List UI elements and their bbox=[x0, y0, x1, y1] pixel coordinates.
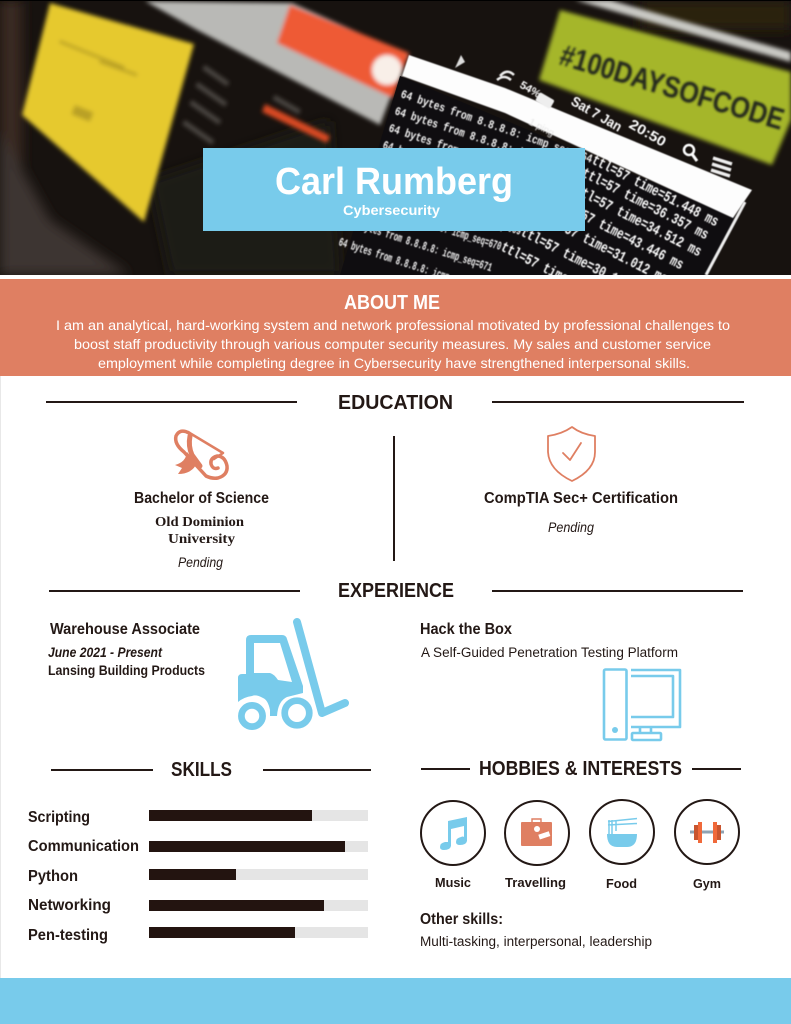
hobby: gym bbox=[675, 800, 739, 891]
degree: Bachelor of Science bbox=[134, 490, 269, 507]
hobby: travelling bbox=[505, 801, 569, 890]
terminal window: ttl=57 time=43.446 ms bbox=[554, 195, 686, 274]
skill: networking bbox=[28, 897, 368, 914]
terminal window: ttl=57 time=30.127 ms bbox=[518, 224, 650, 303]
skill: scripting bbox=[28, 809, 368, 826]
red strip bbox=[262, 104, 330, 143]
hobbies heading: HOBBIES & INTERESTS bbox=[479, 758, 682, 780]
menu bar status text: 54% bbox=[518, 79, 543, 101]
terminal window: 64 bytes from 8.8.8.8: icmp_seq=671 bbox=[347, 215, 494, 275]
hobby: travelling: Travelling bbox=[505, 875, 566, 890]
hobby: food: Food bbox=[606, 876, 637, 891]
terminal window: ttl=57 time=36.357 ms bbox=[579, 165, 711, 244]
header photo: laptop screen bbox=[0, 1, 791, 275]
title box bbox=[203, 148, 585, 231]
strip above green note bbox=[575, 0, 791, 62]
experience: hack the box bbox=[420, 621, 678, 660]
hobby: music: Music bbox=[435, 875, 471, 890]
about text: boost staff productivity through various computer security measures. My sales and customer service bbox=[74, 336, 711, 352]
terminal window: 64 bytes from 8.8.8.8: icmp_seq=670 bbox=[357, 195, 503, 254]
school: Old Dominion bbox=[155, 515, 244, 530]
terminal window: 64 bytes from 8.8.8.8: icmp_seq=666 bbox=[387, 122, 577, 197]
skill: python: Python bbox=[28, 868, 78, 885]
skills bar chart bbox=[28, 809, 368, 944]
terminal window: ttl=57 time=29.771 ms bbox=[498, 239, 630, 318]
certification: CompTIA Sec+ Certification bbox=[484, 490, 678, 507]
school bbox=[155, 515, 244, 547]
terminal window: 1 ping bbox=[527, 117, 556, 139]
terminal window: ttl=57 time=34.512 ms bbox=[572, 182, 704, 261]
grey band bbox=[145, 1, 409, 125]
terminal window: 64 bytes from 8.8.8.8: icmp_seq=669 bbox=[367, 176, 523, 239]
skill: python bbox=[28, 868, 368, 885]
terminal window bbox=[338, 54, 752, 275]
green note bbox=[539, 10, 791, 165]
menu bar status text: 20:50 bbox=[626, 116, 669, 150]
footer band bbox=[0, 978, 791, 1024]
terminal window: 64 bytes from 8.8.8.8: icmp_seq=664 bbox=[399, 88, 594, 167]
skills heading: SKILLS bbox=[171, 759, 232, 781]
hobby: gym: Gym bbox=[693, 876, 721, 891]
experience: warehouse: Lansing Building Products bbox=[48, 663, 205, 678]
icon: shield bbox=[548, 427, 595, 481]
school: University bbox=[168, 532, 235, 547]
other skills bbox=[420, 911, 652, 949]
icon: desktop computer bbox=[604, 670, 680, 740]
terminal window: ttl=57 time=31.012 ms bbox=[538, 209, 670, 288]
experience: hack the box: Hack the Box bbox=[420, 621, 512, 638]
experience: warehouse: Warehouse Associate bbox=[50, 621, 200, 638]
icon: diploma scroll bbox=[175, 431, 227, 478]
education right column bbox=[484, 427, 678, 535]
orange note bbox=[277, 5, 409, 98]
status: Pending bbox=[178, 554, 223, 570]
experience: warehouse: June 2021 - Present bbox=[48, 645, 162, 660]
name: Carl Rumberg bbox=[275, 161, 513, 203]
terminal window: ttl=57 time=51.448 ms bbox=[589, 152, 721, 231]
experience: warehouse bbox=[48, 621, 205, 678]
skill: scripting: Scripting bbox=[28, 809, 90, 826]
other skills: Multi-tasking, interpersonal, leadership bbox=[420, 934, 652, 949]
about text: I am an analytical, hard-working system and network professional motivated by professional challenges to bbox=[56, 317, 730, 333]
menu bar status text: Sat 7 Jan bbox=[568, 93, 625, 135]
skill: pen-testing: Pen-testing bbox=[28, 927, 108, 944]
about me panel bbox=[0, 279, 791, 376]
menu bar status text bbox=[455, 55, 732, 176]
education heading: EDUCATION bbox=[338, 392, 453, 414]
hobby: music bbox=[421, 801, 485, 890]
skill: pen-testing bbox=[28, 927, 368, 944]
skill: networking: Networking bbox=[28, 897, 111, 914]
role: Cybersecurity bbox=[343, 202, 440, 218]
icon: forklift bbox=[238, 622, 345, 727]
terminal window: 64 bytes from 8.8.8.8: icmp_seq=667 bbox=[381, 139, 559, 210]
education left column bbox=[134, 431, 269, 570]
skill: communication bbox=[28, 838, 368, 855]
yellow note bbox=[22, 3, 194, 222]
experience: hack the box: A Self-Guided Penetration Testing Platform bbox=[421, 645, 678, 660]
terminal window: 64 bytes from 8.8.8.8: icmp_seq=668 bbox=[375, 156, 543, 224]
hobby: food bbox=[590, 800, 654, 891]
about text bbox=[56, 317, 730, 371]
about heading: ABOUT ME bbox=[344, 292, 440, 314]
about text: employment while completing degree in Cybersecurity have strengthened interpersonal skills. bbox=[98, 355, 690, 371]
other skills: Other skills: bbox=[420, 911, 503, 928]
experience heading: EXPERIENCE bbox=[338, 580, 454, 602]
terminal window: 64 bytes from 8.8.8.8: icmp_seq=665 bbox=[393, 105, 584, 180]
terminal window: 64 bytes from 8.8.8.8: icmp_seq=672 bbox=[337, 235, 484, 295]
status: Pending bbox=[548, 519, 594, 535]
skill: communication: Communication bbox=[28, 838, 139, 855]
